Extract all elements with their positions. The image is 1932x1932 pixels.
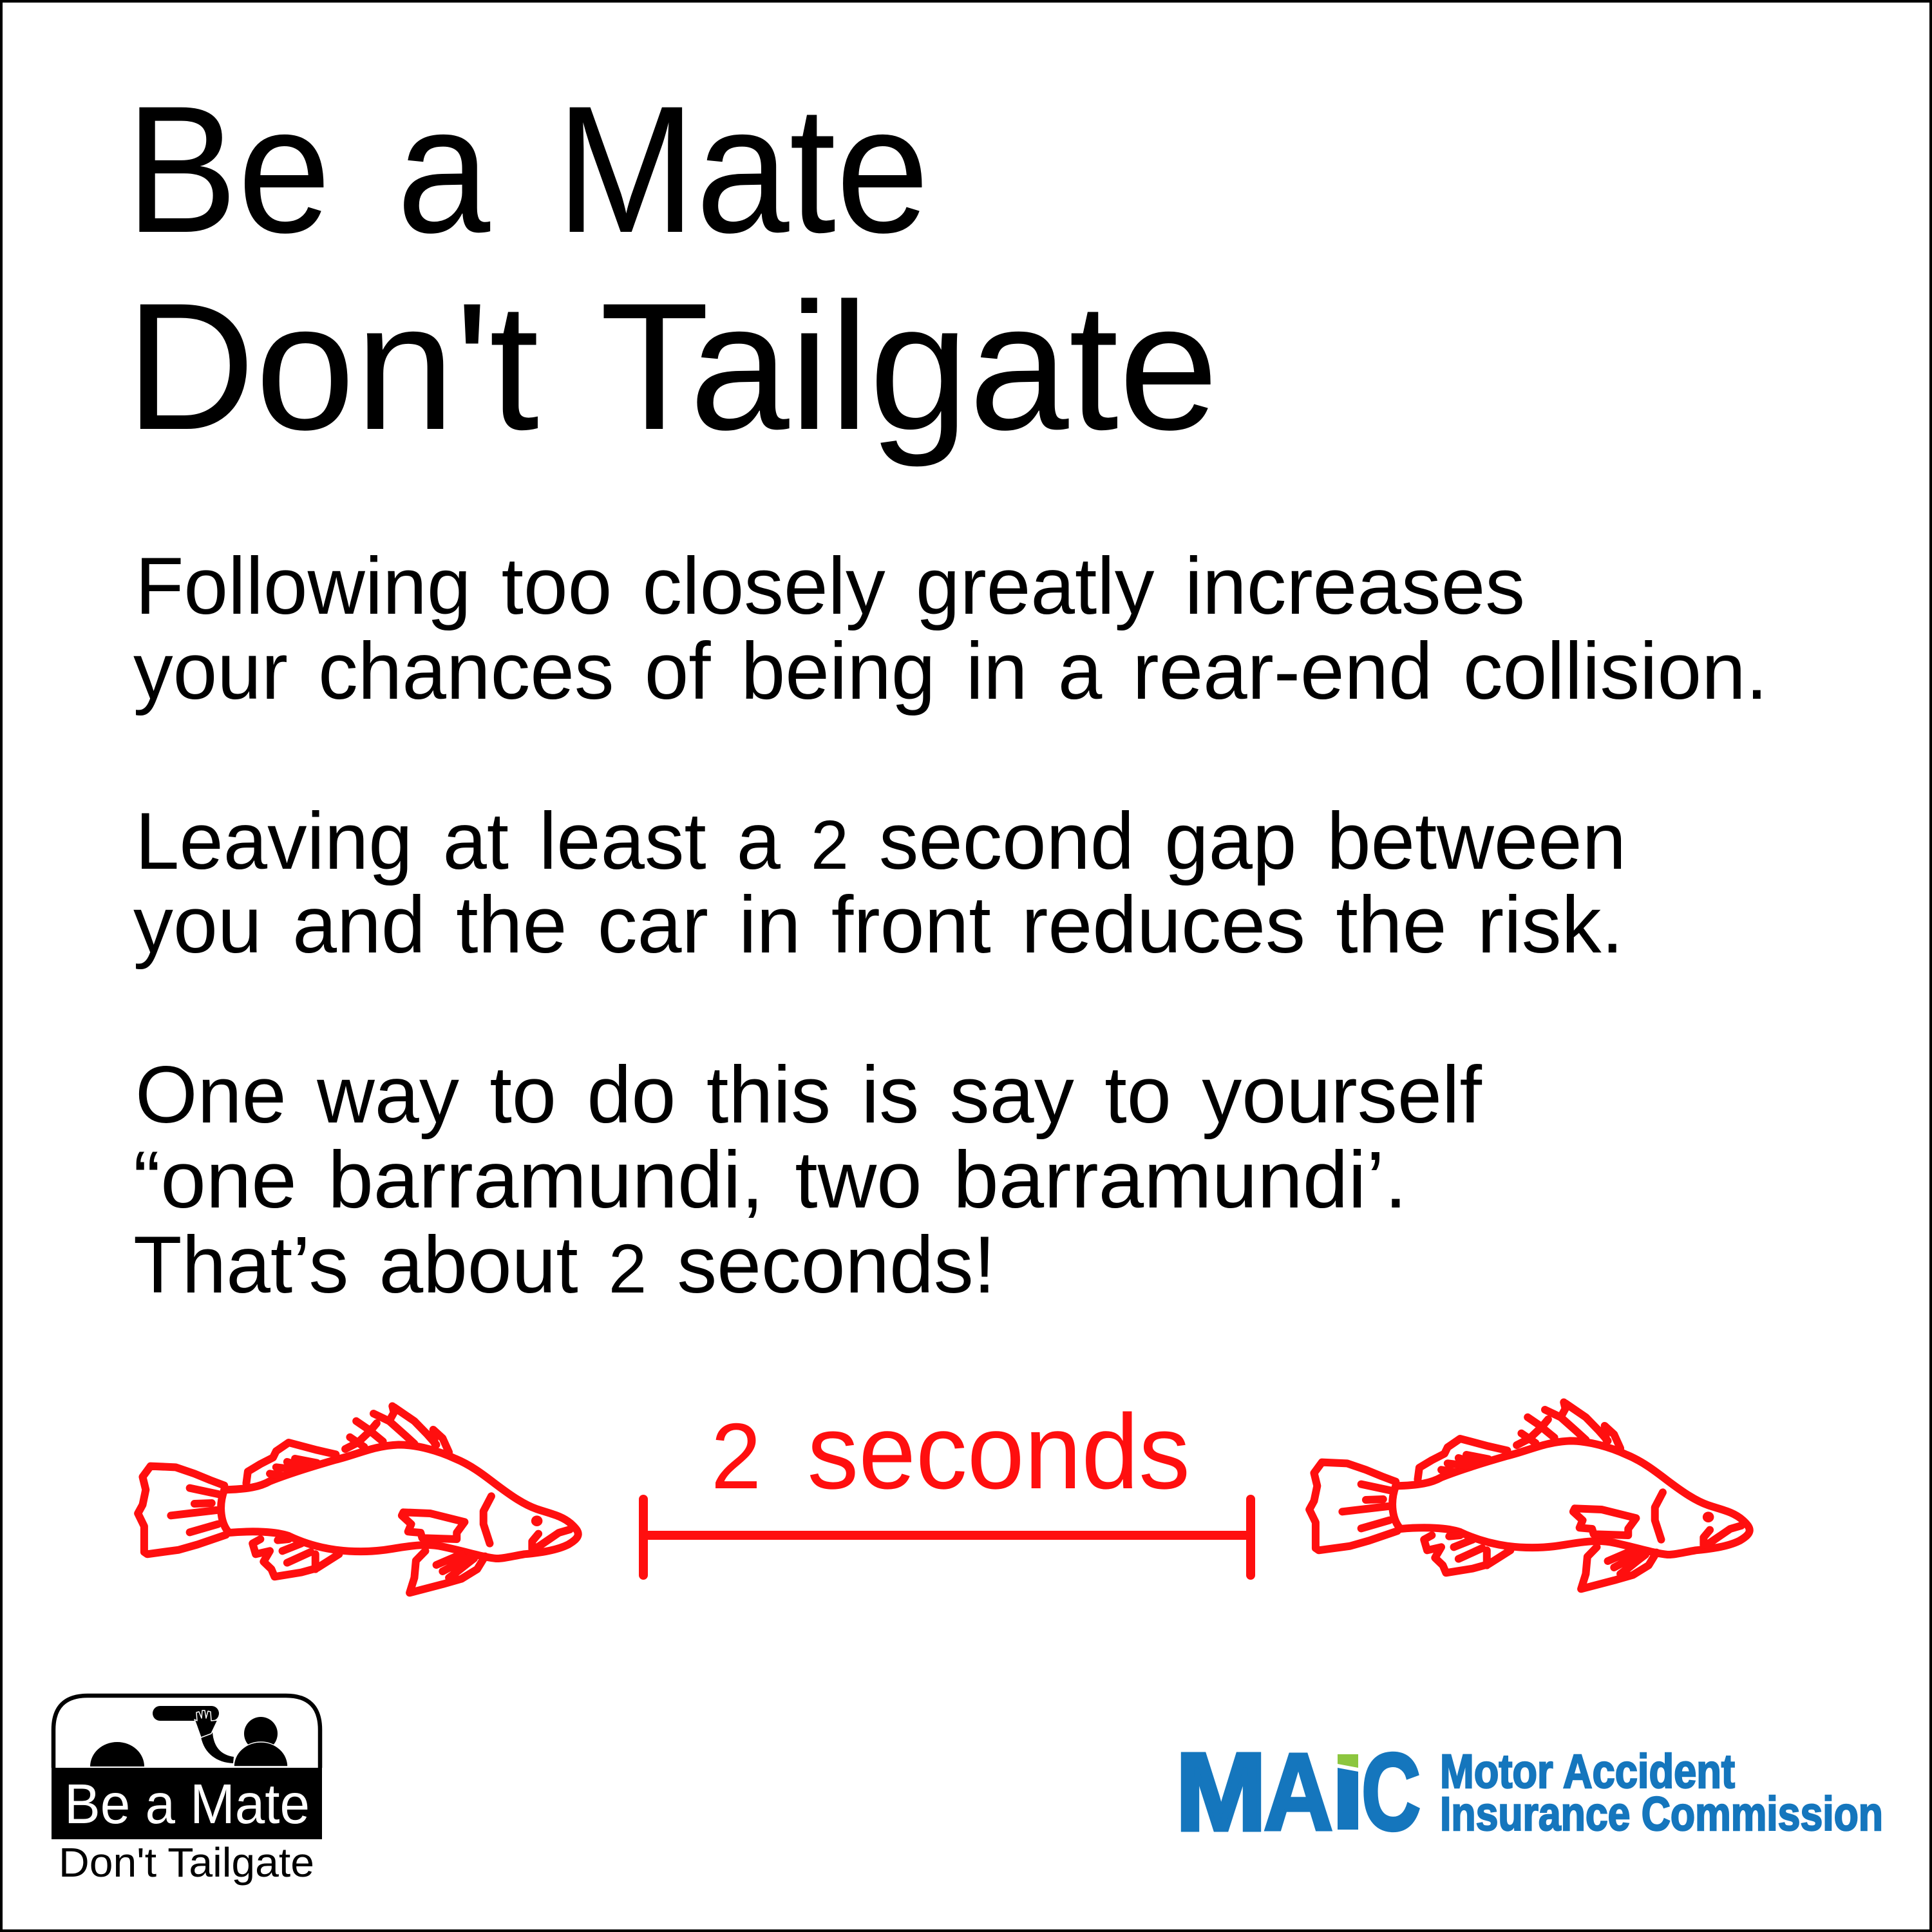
icon: right fish — [1309, 1402, 1750, 1589]
text block: barramundi: “one barramundi, two barramundi’. — [133, 1135, 1407, 1225]
icon: waving arm — [194, 1710, 234, 1763]
text block: barramundi — [133, 1050, 1482, 1310]
logo: MAIC: C — [1361, 1731, 1421, 1853]
logo text: commission name: Motor Accident — [1440, 1745, 1735, 1798]
text block: 2 second gap: Leaving at least a 2 second gap between — [135, 797, 1626, 886]
icon: passenger silhouette — [234, 1717, 288, 1766]
icon: driver silhouette — [90, 1742, 144, 1766]
text block: 2 second gap — [133, 797, 1626, 970]
logo: MAIC: A — [1264, 1731, 1333, 1853]
text block: 2 second gap: you and the car in front reduces the risk. — [133, 880, 1624, 970]
title — [126, 68, 1218, 468]
text block: rear-end collision — [133, 542, 1768, 716]
text block: barramundi: That’s about 2 seconds! — [133, 1220, 996, 1310]
icon: rear view mirror — [153, 1706, 219, 1721]
icon: left fish — [138, 1406, 578, 1593]
text block: barramundi: One way to do this is say to yourself — [135, 1050, 1482, 1140]
text block: rear-end collision: your chances of being in a rear-end collision. — [133, 627, 1768, 716]
title: Be a Mate — [126, 68, 929, 270]
logo: MAIC: M — [1176, 1731, 1266, 1853]
text block: rear-end collision: Following too closely greatly increases — [135, 542, 1525, 631]
distance marker — [643, 1499, 1251, 1575]
title: Don't Tailgate — [126, 265, 1218, 468]
logo text: commission name — [1440, 1745, 1883, 1841]
label: 2 seconds: 2 seconds — [711, 1392, 1190, 1511]
logo text: Be a Mate: Be a Mate — [64, 1773, 310, 1835]
logo text: Don't Tailgate: Don't Tailgate — [59, 1839, 314, 1886]
logo: Be a Mate Don't Tailgate — [52, 1696, 322, 1886]
logo: MAIC — [1176, 1731, 1883, 1853]
